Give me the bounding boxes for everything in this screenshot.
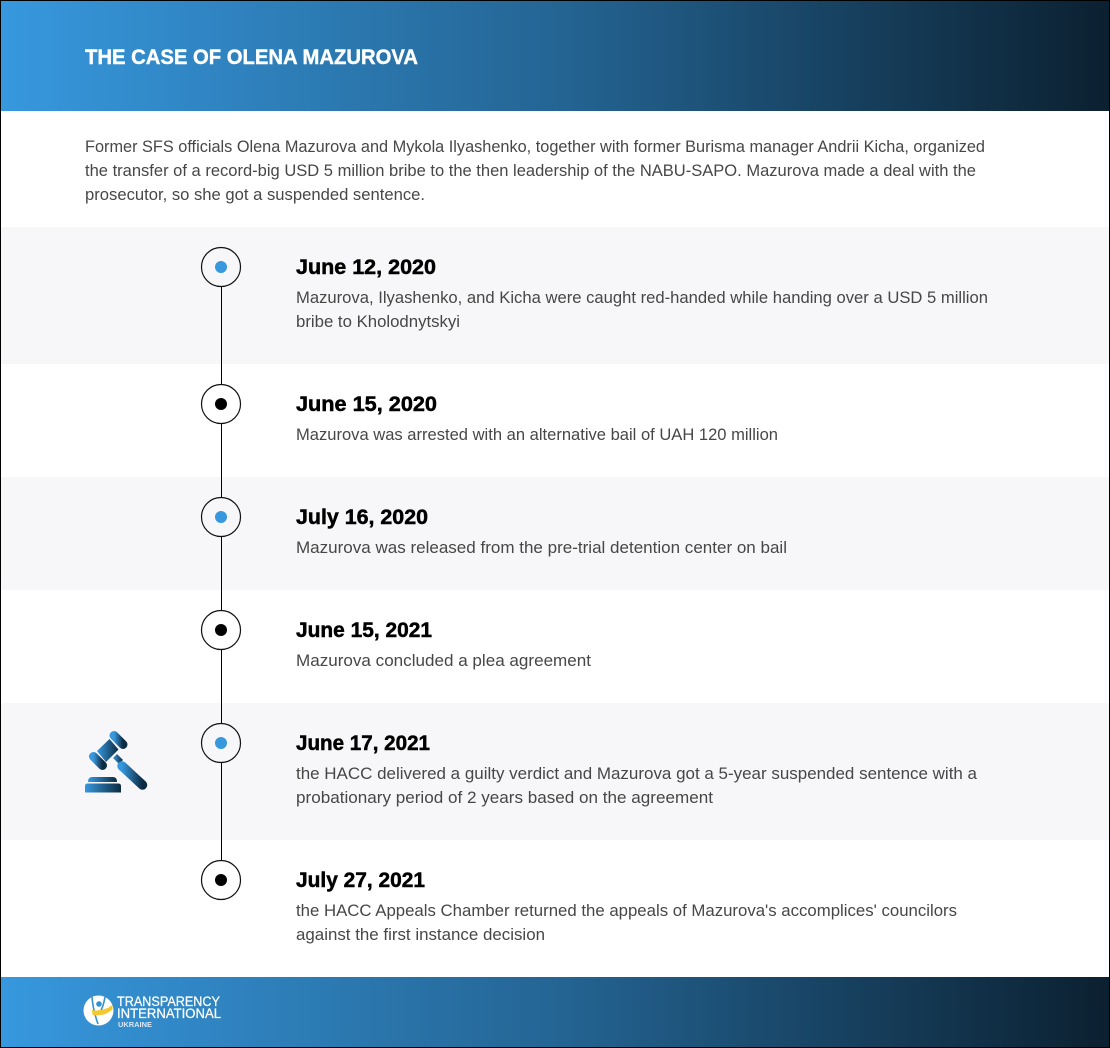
timeline entry: June 15, 2021 (202, 610, 591, 670)
timeline entry: July 16, 2020: Mazurova was released from the pre-trial detention center on bail (296, 539, 787, 557)
timeline entry: July 16, 2020: July 16, 2020 (296, 505, 428, 529)
title: THE CASE OF OLENA MAZUROVA (85, 45, 418, 69)
intro text (85, 138, 985, 204)
timeline entry: June 17, 2021: the HACC delivered a guilty verdict and Mazurova got a 5-year suspended sentence with a (296, 765, 978, 783)
timeline entry: July 27, 2021: the HACC Appeals Chamber returned the appeals of Mazurova's accomplices' councilors (296, 902, 957, 920)
timeline entry: June 12, 2020: June 12, 2020 (296, 255, 436, 279)
logo: Transparency International Ukraine (84, 994, 221, 1029)
intro text: prosecutor, so she got a suspended sentence. (85, 186, 425, 204)
timeline entry: June 15, 2021: June 15, 2021 (296, 618, 432, 642)
logo: Transparency International Ukraine: TRANSPARENCY (117, 994, 220, 1009)
timeline entry: June 12, 2020: Mazurova, Ilyashenko, and Kicha were caught red-handed while handing over a USD 5 million (296, 289, 988, 307)
timeline entry: June 15, 2021: Mazurova concluded a plea agreement (296, 652, 591, 670)
timeline entry: July 27, 2021 (202, 860, 957, 944)
timeline entry: June 12, 2020: bribe to Kholodnytskyi (296, 313, 460, 331)
footer banner (0, 977, 1110, 1048)
panel: row backgrounds (0, 227, 1110, 840)
timeline entry: June 15, 2020: Mazurova was arrested with an alternative bail of UAH 120 million (296, 426, 778, 444)
timeline entry: July 27, 2021: against the first instance decision (296, 926, 545, 944)
timeline entry: June 17, 2021: probationary period of 2 years based on the agreement (296, 789, 713, 807)
timeline entry: June 17, 2021 (202, 724, 978, 807)
icon: gavel (85, 736, 142, 792)
timeline entry: June 15, 2020: June 15, 2020 (296, 392, 437, 416)
timeline entry: June 17, 2021: June 17, 2021 (296, 731, 430, 755)
timeline entry: July 16, 2020 (202, 498, 787, 557)
logo: Transparency International Ukraine: INTERNATIONAL (117, 1006, 221, 1021)
timeline entry: July 27, 2021: July 27, 2021 (296, 868, 425, 892)
timeline line (220, 267, 222, 880)
timeline entry: June 12, 2020 (202, 248, 988, 331)
intro text: the transfer of a record-big USD 5 million bribe to the then leadership of the NABU-SAPO. Mazurova made a deal with the (85, 162, 976, 180)
intro text: Former SFS officials Olena Mazurova and Mykola Ilyashenko, together with former Burisma manager Andrii Kicha, organized (85, 138, 985, 156)
timeline entry: June 15, 2020 (202, 384, 778, 444)
header banner (0, 0, 1110, 111)
logo: Transparency International Ukraine: UKRAINE (118, 1022, 152, 1029)
